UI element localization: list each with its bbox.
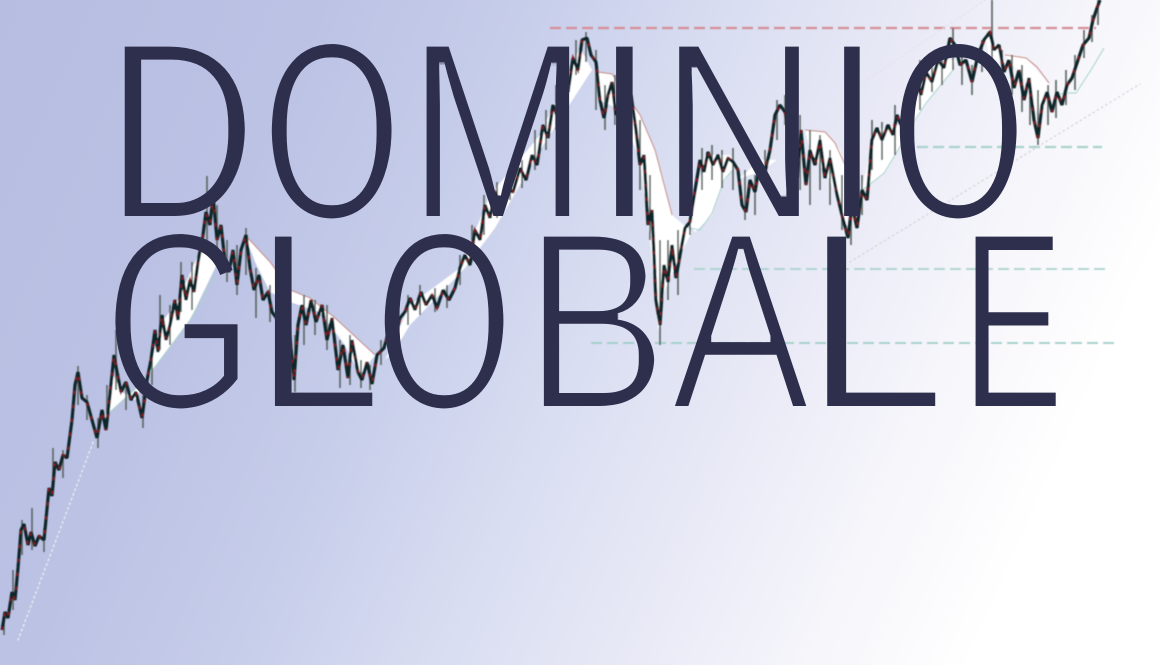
title: DOMINIO GLOBALE: B	[524, 179, 668, 464]
title: DOMINIO GLOBALE	[104, 0, 1063, 464]
moving average lines	[110, 48, 1104, 412]
title: DOMINIO GLOBALE: G	[104, 178, 253, 463]
title: DOMINIO GLOBALE: O	[375, 178, 513, 464]
dashed level lines	[550, 28, 1119, 343]
title: DOMINIO GLOBALE: L	[253, 178, 382, 463]
title: DOMINIO GLOBALE: A	[670, 178, 811, 463]
title: DOMINIO GLOBALE: L	[804, 180, 946, 464]
title: DOMINIO GLOBALE: E	[963, 180, 1063, 464]
white bands between price and moving averages	[105, 35, 1049, 418]
